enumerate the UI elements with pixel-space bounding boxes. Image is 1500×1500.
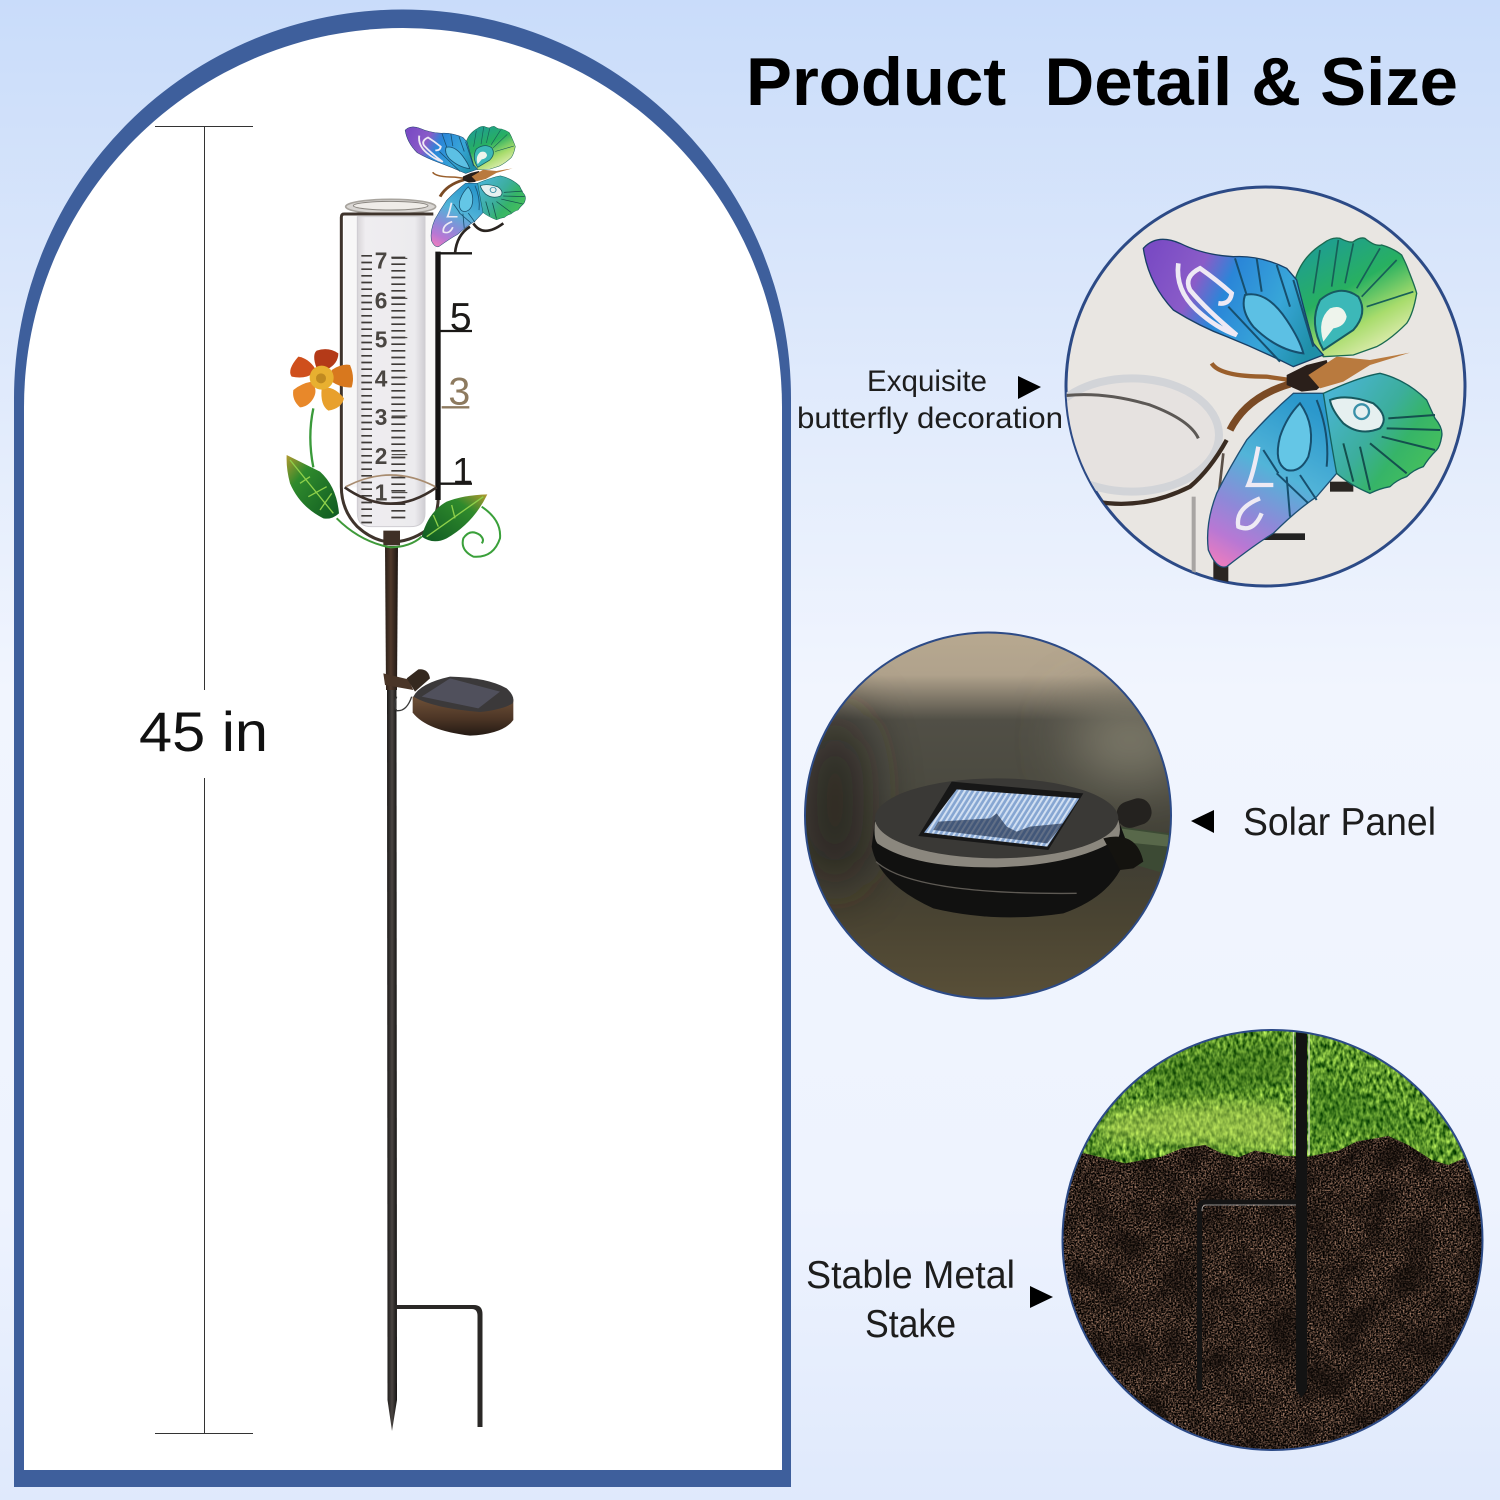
callout: stake label: Stable Metal: [806, 1254, 1015, 1297]
solar arm: [1117, 798, 1170, 872]
upper left wing: [1143, 239, 1323, 367]
measuring scale: 6: [375, 287, 387, 313]
right leaf: [422, 494, 487, 541]
height dimension line: [155, 126, 253, 1434]
callout: butterfly label: Exquisite: [867, 365, 987, 398]
stake in soil: [1200, 1027, 1309, 1398]
product: rain gauge stake: [287, 126, 525, 1431]
solar clamp: [1103, 837, 1143, 870]
metal frame: [341, 214, 503, 542]
lower right wing: [1323, 373, 1442, 493]
glass rim: [1044, 378, 1353, 587]
callout: stake label: [806, 1254, 1015, 1346]
solar housing: [872, 778, 1128, 917]
arrow: butterfly: [1018, 376, 1041, 399]
rain gauge and decorations: [287, 199, 503, 557]
callout: butterfly label: [797, 365, 1063, 435]
measuring scale: 3: [375, 404, 387, 430]
measuring scale: 5: [375, 327, 387, 353]
glass tube: [344, 199, 436, 527]
arrow: solar panel: [1191, 810, 1214, 833]
scale numbers on frame: [448, 295, 473, 491]
large butterfly: [1143, 238, 1442, 567]
scale numbers on frame: 1: [452, 449, 473, 491]
callout: stake label: Stake: [865, 1303, 956, 1346]
body and antennae: [1212, 353, 1410, 430]
measuring scale: 2: [375, 443, 387, 469]
measuring scale: 1: [375, 480, 387, 506]
panel: stake detail circle: [1055, 1025, 1490, 1460]
solar cells: [918, 782, 1083, 850]
title: Product Detail & Size: [746, 44, 1458, 120]
grass: [1074, 1031, 1471, 1174]
arrow: stake: [1030, 1286, 1053, 1308]
mount joint: [383, 531, 400, 545]
panel: arched product frame: [14, 10, 791, 1487]
flower: [290, 349, 353, 467]
stem and tendril: [337, 507, 500, 557]
soil: [1055, 1130, 1490, 1460]
measuring scale: [367, 247, 407, 523]
scale numbers on frame: 3: [448, 370, 470, 414]
small butterfly: [405, 126, 525, 247]
panel: solar detail circle: [800, 630, 1190, 1005]
lower left wing: [1208, 393, 1337, 567]
callout: butterfly label: butterfly decoration: [797, 402, 1063, 435]
callout: solar panel label: Solar Panel: [1243, 801, 1436, 844]
panel: butterfly detail circle: [1044, 187, 1465, 587]
solar light: [383, 669, 513, 736]
upper right wing: [1295, 238, 1417, 357]
height label: 45 in: [139, 700, 268, 763]
measuring scale: 4: [375, 365, 388, 391]
stake pole: [385, 546, 482, 1431]
measuring scale: 7: [375, 247, 387, 273]
scale numbers on frame: 5: [450, 295, 472, 339]
left leaf: [287, 455, 339, 519]
